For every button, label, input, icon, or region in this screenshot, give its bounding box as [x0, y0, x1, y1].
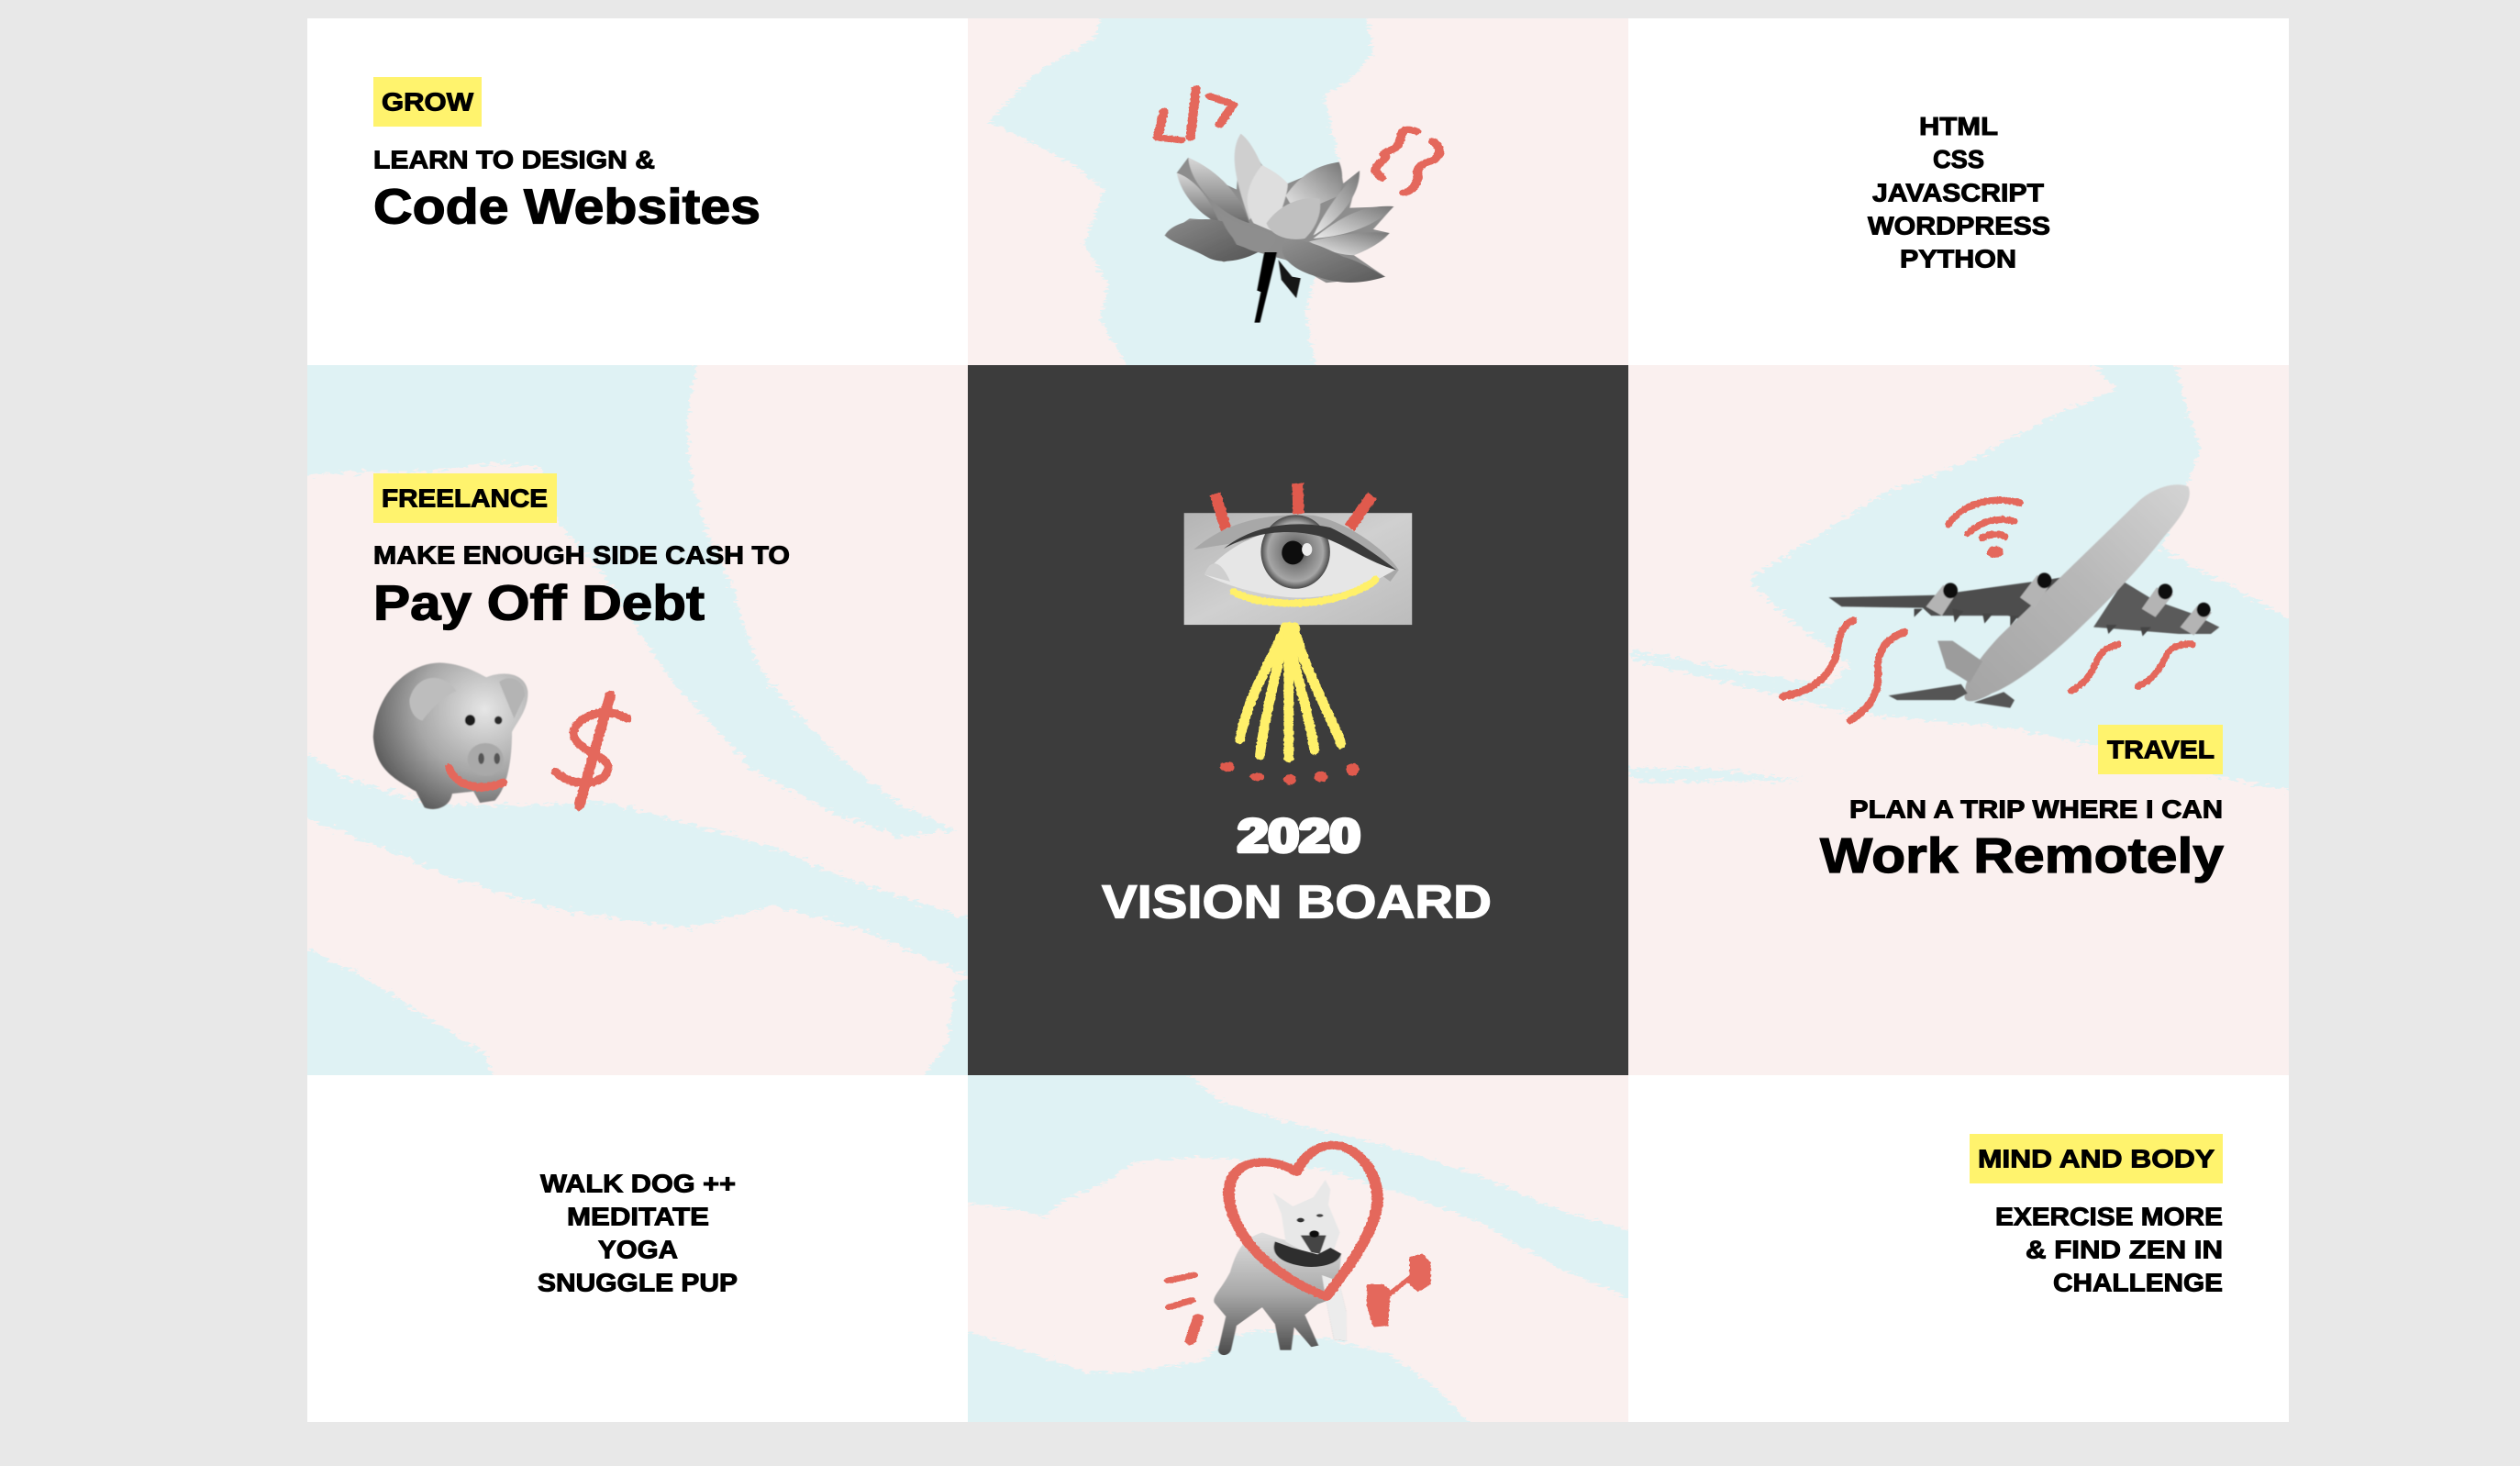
text block: skills list: WORDPRESS [1868, 211, 2050, 240]
text block: exercise [1995, 1202, 2223, 1297]
tag: grow: GROW [382, 88, 474, 116]
tag: freelance: FREELANCE [382, 484, 548, 512]
text block: habits [538, 1169, 738, 1297]
text block: habits: SNUGGLE PUP [538, 1268, 738, 1297]
panel: tech list [1628, 18, 2289, 365]
heading: code websites: Code Websites [373, 180, 760, 235]
text block: skills list: CSS [1933, 145, 1984, 173]
icon: dollar sign and smile [449, 695, 627, 805]
text block: skills list: JAVASCRIPT [1872, 178, 2044, 207]
heading: pay off debt: Pay Off Debt [373, 576, 705, 631]
icon: dog [1214, 1180, 1347, 1355]
icon: airplane [1828, 484, 2219, 708]
icon: eye photo [1184, 513, 1412, 625]
subheading: plan a trip: PLAN A TRIP WHERE I CAN [1849, 794, 2223, 824]
icon: code brackets [1158, 89, 1439, 193]
icon: heart, bone and motion lines [1168, 1145, 1431, 1341]
tag: mind and body [1970, 1134, 2223, 1183]
brush stroke background [294, 358, 986, 1097]
panel: lotus [968, 12, 1628, 376]
subheading: learn to design: LEARN TO DESIGN & [373, 145, 655, 174]
panel: dog [955, 1067, 1647, 1434]
brush stroke background [989, 12, 1373, 376]
panel: freelance [294, 358, 986, 1097]
heading: work remotely: Work Remotely [1820, 828, 2224, 883]
text block: exercise: CHALLENGE [2053, 1268, 2223, 1297]
title: vision board: VISION BOARD [1102, 875, 1492, 928]
icon: wifi and wind strokes [1782, 500, 2193, 721]
icon: piggy bank [373, 662, 527, 809]
panel: travel [1619, 358, 2307, 1075]
tag: freelance [373, 473, 557, 523]
panel: mind and body [1628, 1075, 2289, 1422]
text block: skills list [1868, 112, 2050, 273]
brush stroke background [1619, 358, 2307, 794]
text block: habits: YOGA [598, 1235, 678, 1264]
text block: habits: WALK DOG ++ [540, 1169, 736, 1198]
tag: travel: TRAVEL [2107, 736, 2215, 763]
text block: skills list: HTML [1919, 112, 1998, 140]
title: 2020: 2020 [1238, 810, 1360, 861]
text block: exercise: & FIND ZEN IN [2026, 1235, 2223, 1264]
panel: habits list [307, 1075, 968, 1422]
tag: travel [2098, 725, 2223, 774]
brush stroke background [955, 1067, 1647, 1434]
text block: exercise: EXERCISE MORE [1995, 1202, 2223, 1231]
icon: lotus flower [1165, 134, 1393, 323]
tag: grow [373, 77, 482, 127]
tag: mind and body: MIND AND BODY [1978, 1145, 2215, 1172]
panel: grow [307, 18, 968, 365]
icon: eye rays [1216, 483, 1376, 784]
panel: center vision board [968, 365, 1628, 1075]
text block: skills list: PYTHON [1900, 244, 2016, 273]
text block: habits: MEDITATE [567, 1202, 709, 1231]
subheading: side cash: MAKE ENOUGH SIDE CASH TO [373, 541, 790, 569]
